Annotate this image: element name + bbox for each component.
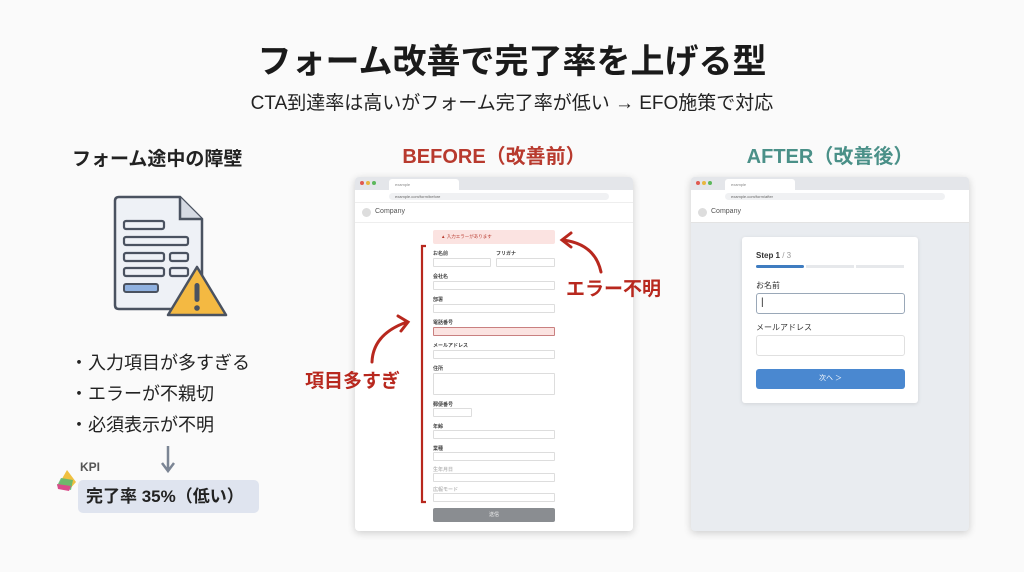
arrow: to error [560,231,602,274]
title: フォーム改善で完了率を上げる型 [258,43,766,81]
panel: before browser: example.com/form/before [395,194,440,199]
bullet list: ・入力項目が多すぎる [70,353,250,373]
icon: form with warning [114,196,228,316]
panel: before browser [355,177,633,531]
panel: before browser: お名前 [433,251,448,257]
step form card: お名前 [756,281,780,290]
panel: before browser: example [395,182,410,187]
panel: before browser: フリガナ [496,251,516,257]
panel: before browser: 電話番号 [433,320,453,326]
panel: before browser: 住所 [433,366,443,372]
submit button: 送信 [489,512,499,518]
arrow: down [161,446,175,473]
callout: too many fields: 項目多すぎ [305,371,400,392]
panel: before browser: 会社名 [433,274,448,280]
form fields [433,250,555,502]
panel: before browser: 年齢 [433,424,443,430]
panel: after browser: example.com/form/after [731,194,773,199]
step form card: 次へ ＞ [819,375,842,382]
submit button [433,508,555,522]
error banner [433,230,555,244]
panel: before browser: 広報モード [433,487,458,493]
callout: unclear error: エラー不明 [566,279,661,300]
panel: after browser: example [731,182,746,187]
panel: after browser: Company [711,208,741,215]
kpi box [78,480,259,513]
panel: before browser: メールアドレス [433,343,468,349]
step form card: メールアドレス [756,323,812,332]
panel: before browser: Company [375,208,405,215]
step form card [742,237,918,403]
heading: after: AFTER（改善後） [747,146,913,168]
error banner: ▲ 入力エラーがあります [441,234,492,239]
kpi box: 完了率 35%（低い） [86,487,244,506]
panel: after browser [691,177,969,531]
panel: before browser: 郵便番号 [433,402,453,408]
panel: barriers [57,148,259,513]
bracket: too many fields [420,244,426,504]
panel: before browser: 部署 [433,297,443,303]
icon: kpi [57,470,76,491]
bullet list: ・必須表示が不明 [70,415,214,435]
heading: barriers: フォーム途中の障壁 [72,149,242,170]
bullet list: ・エラーが不親切 [70,384,214,404]
subtitle: CTA到達率は高いがフォーム完了率が低い → EFO施策で対応 [251,93,773,114]
kpi label: KPI [80,460,100,474]
panel: before browser: 生年月日 [433,467,453,473]
bullet list [70,353,250,435]
step form card: | [761,297,764,308]
arrow: to fields [370,314,410,364]
heading: before: BEFORE（改善前） [402,146,586,168]
step form card: Step 1 / 3 [756,251,791,260]
panel: before browser: 業種 [433,446,443,452]
